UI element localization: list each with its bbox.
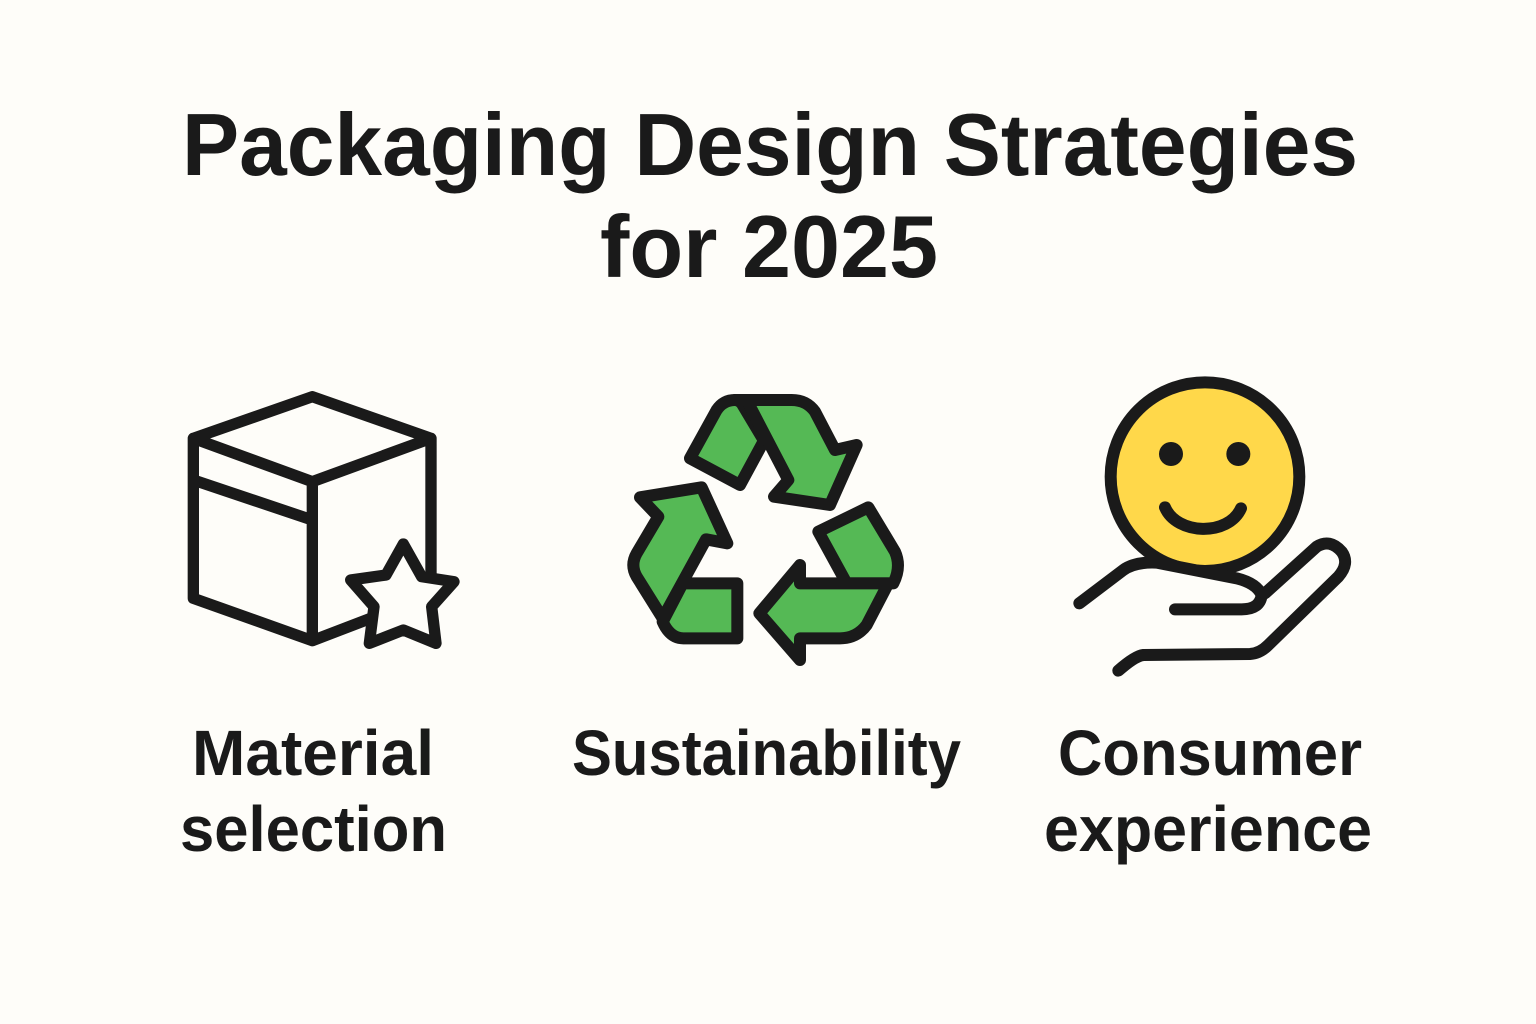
label: sustainability: Sustainability — [572, 717, 961, 789]
label: consumer experience: experience — [1044, 793, 1372, 865]
icon: recycling symbol — [633, 400, 898, 660]
icon: smiley held by hand — [1079, 382, 1345, 671]
title: for 2025 — [600, 197, 938, 296]
label: consumer experience — [1044, 717, 1372, 865]
title — [182, 95, 1358, 296]
label: material selection: selection — [180, 793, 447, 865]
label: material selection — [180, 717, 447, 865]
label: material selection: Material — [192, 717, 434, 789]
icon: box with star — [193, 397, 454, 643]
title: Packaging Design Strategies — [182, 95, 1358, 194]
label: consumer experience: Consumer — [1058, 717, 1362, 789]
